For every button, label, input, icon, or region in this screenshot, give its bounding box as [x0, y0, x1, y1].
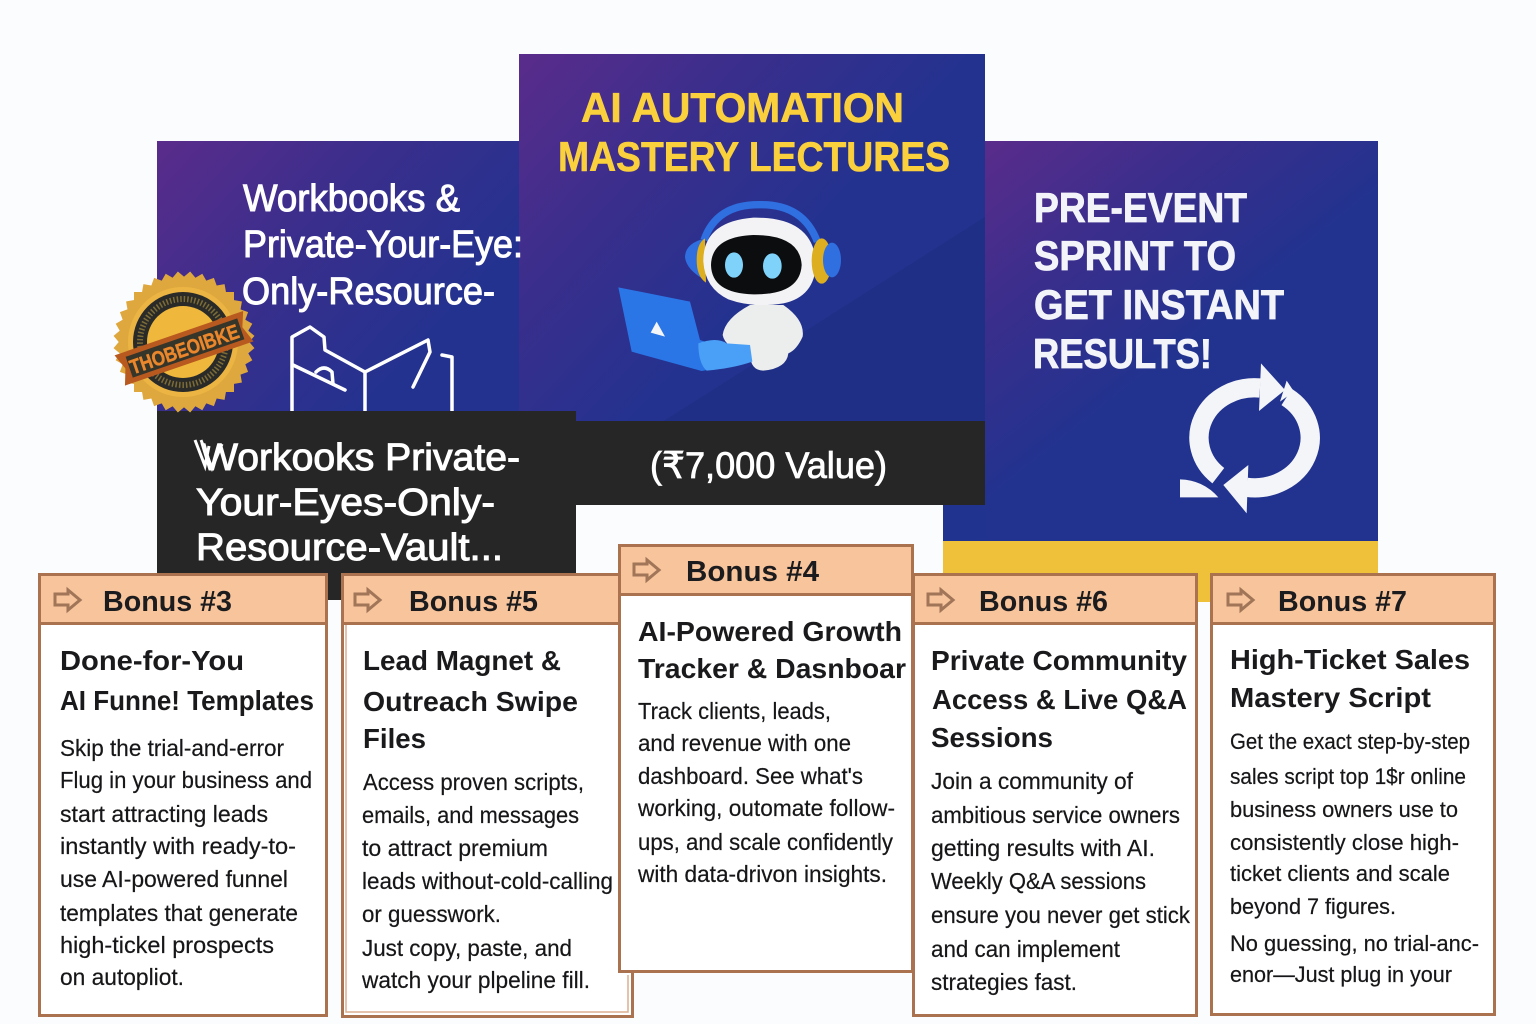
card text: bonus 4: working, outomate follow-	[637, 795, 895, 821]
card header: bonus 7	[1212, 574, 1494, 624]
card text: bonus 3: instantly with ready-to-	[60, 833, 296, 859]
card text: bonus 4: and revenue with one	[638, 730, 851, 756]
heading: workbooks cover title: Private-Your-Eye:	[243, 224, 523, 266]
card heading: bonus 5: Files	[363, 723, 426, 754]
card header: bonus 3	[40, 574, 326, 624]
title band: workbooks vault	[157, 411, 576, 600]
card heading: bonus 6: Private Community	[931, 645, 1187, 676]
card header: bonus 3: Bonus #3	[103, 586, 232, 618]
card heading: bonus 5	[363, 645, 578, 754]
card: bonus 5	[342, 574, 632, 1016]
card header: bonus 5	[342, 574, 632, 624]
card heading: bonus 7: Mastery Script	[1230, 682, 1431, 713]
icon: refresh arrows	[1180, 363, 1310, 513]
card text: bonus 4: dashboard. See what's	[638, 763, 863, 789]
card text: bonus 5: Just copy, paste, and	[362, 935, 572, 961]
card text: bonus 3: Skip the trial-and-error	[60, 735, 284, 761]
card text: bonus 4	[637, 698, 895, 887]
card header: bonus 4: Bonus #4	[686, 556, 819, 588]
heading: pre-event sprint: RESULTS!	[1033, 330, 1212, 377]
card text: bonus 5	[361, 769, 613, 993]
card heading: bonus 5: Lead Magnet &	[363, 645, 561, 676]
card text: bonus 5: emails, and messages	[362, 802, 579, 828]
card heading: bonus 4	[638, 616, 906, 684]
card text: bonus 5: or guesswork.	[362, 901, 501, 927]
panel: AI automation mastery lectures	[519, 54, 985, 421]
heading: pre-event sprint	[1033, 184, 1284, 377]
card text: bonus 7: enor—Just plug in your	[1230, 962, 1452, 987]
card text: bonus 6: ambitious service owners	[931, 802, 1180, 828]
card text: bonus 3: templates that generate	[60, 900, 298, 926]
panel: pre-event sprint	[943, 141, 1378, 602]
badge: gold seal	[114, 272, 254, 412]
heading: workbooks cover title: Only-Resource-	[242, 271, 495, 313]
card text: bonus 6: strategies fast.	[931, 969, 1077, 995]
card text: bonus 6: Weekly Q&A sessions	[931, 868, 1146, 894]
card heading: bonus 7	[1230, 644, 1470, 713]
card heading: bonus 6: Sessions	[931, 722, 1053, 753]
card heading: bonus 4: Tracker & Dasnboar	[638, 653, 906, 684]
card text: bonus 3	[60, 735, 312, 990]
card text: bonus 3: on autopliot.	[60, 964, 184, 990]
card text: bonus 6: getting results with AI.	[931, 835, 1155, 861]
card text: bonus 4: ups, and scale confidently	[638, 829, 893, 855]
badge: gold seal: THOBEOIBKE	[127, 320, 242, 379]
card text: bonus 3: Flug in your business and	[60, 767, 312, 793]
card text: bonus 7: ticket clients and scale	[1230, 861, 1450, 886]
heading: AI automation mastery lectures	[558, 84, 950, 180]
card text: bonus 7: Get the exact step-by-step	[1230, 729, 1470, 754]
card header: bonus 6: Bonus #6	[979, 586, 1108, 618]
card text: bonus 5: leads without-cold-calling	[362, 868, 613, 894]
heading: pre-event sprint: SPRINT TO	[1034, 232, 1236, 279]
card text: bonus 5: watch your plpeline fill.	[361, 967, 590, 993]
card: bonus 3	[40, 574, 326, 1016]
panel: workbooks cover	[157, 141, 527, 411]
heading: pre-event sprint: GET INSTANT	[1034, 281, 1284, 328]
card text: bonus 6: ensure you never get stick	[931, 902, 1190, 928]
card text: bonus 6: Join a community of	[931, 768, 1133, 794]
value band: 7,000 value	[519, 421, 985, 505]
card text: bonus 6	[931, 768, 1190, 995]
card text: bonus 5: to attract premium	[362, 835, 548, 861]
heading: workbooks cover title: Workbooks &	[243, 178, 460, 220]
icon: open book outline	[292, 327, 452, 411]
card text: bonus 7	[1230, 729, 1479, 987]
title band: workbooks vault: Resource-Vault...	[196, 527, 503, 569]
card heading: bonus 5: Outreach Swipe	[363, 686, 578, 717]
card heading: bonus 4: AI-Powered Growth	[638, 616, 902, 647]
card heading: bonus 7: High-Ticket Sales	[1230, 644, 1470, 675]
title band: workbooks vault: Workooks Private-	[201, 437, 520, 479]
card text: bonus 7: business owners use to	[1230, 797, 1458, 822]
card text: bonus 7: beyond 7 figures.	[1230, 894, 1396, 919]
heading: AI automation mastery lectures: AI AUTOMATION	[581, 84, 904, 131]
card text: bonus 3: start attracting leads	[60, 801, 268, 827]
card header: bonus 7: Bonus #7	[1278, 586, 1407, 618]
card text: bonus 4: Track clients, leads,	[638, 698, 831, 724]
card: bonus 6	[914, 574, 1196, 1016]
heading: pre-event sprint: PRE-EVENT	[1034, 184, 1247, 231]
card text: bonus 6: and can implement	[931, 936, 1120, 962]
card header: bonus 5: Bonus #5	[409, 586, 538, 618]
card heading: bonus 6	[931, 645, 1187, 753]
heading: workbooks cover title	[242, 178, 523, 313]
title band: workbooks vault: Your-Eyes-Only-	[196, 482, 495, 524]
card heading: bonus 6: Access & Live Q&A	[932, 684, 1187, 715]
card text: bonus 3: high-tickel prospects	[60, 932, 274, 958]
card text: bonus 3: use AI-powered funnel	[60, 866, 288, 892]
card: bonus 7	[1212, 574, 1494, 1014]
card text: bonus 7: sales script top 1$r online	[1230, 764, 1466, 789]
card: bonus 4	[620, 546, 912, 972]
card text: bonus 5: Access proven scripts,	[363, 769, 584, 795]
card header: bonus 6	[914, 574, 1196, 624]
card text: bonus 4: with data-drivon insights.	[637, 861, 887, 887]
card text: bonus 7: No guessing, no trial-anc-	[1230, 931, 1479, 956]
icon: robot with headset and laptop	[618, 205, 841, 371]
card header: bonus 4	[620, 546, 912, 594]
card text: bonus 7: consistently close high-	[1230, 830, 1459, 855]
card heading: bonus 3: Done-for-You	[60, 645, 244, 676]
heading: AI automation mastery lectures: MASTERY LECTURES	[558, 133, 950, 180]
card heading: bonus 3	[60, 645, 314, 716]
card heading: bonus 3: AI Funne! Templates	[60, 685, 314, 716]
value band: 7,000 value: (₹7,000 Value)	[650, 445, 887, 486]
